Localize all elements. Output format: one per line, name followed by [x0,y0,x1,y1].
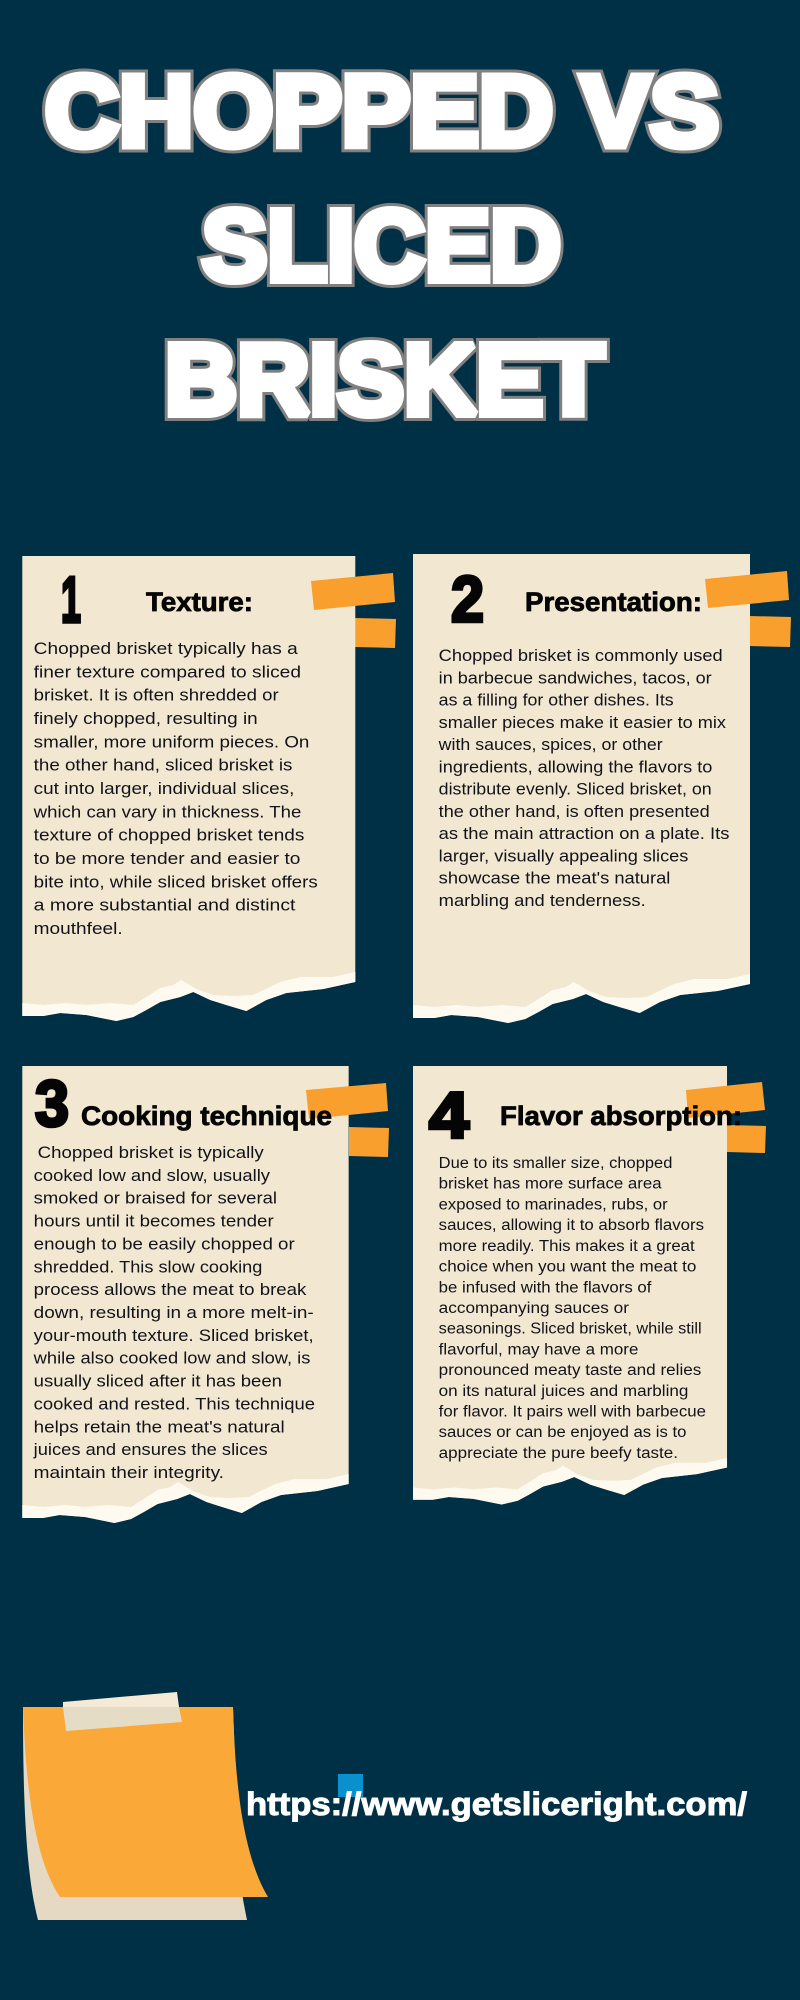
text block: presentation: showcase the meat's natural [439,870,670,888]
number 4: 4 [429,1078,469,1152]
text block: cooking technique: hours until it becomes tender [34,1212,274,1231]
text block: cooking technique: cooked and rested. This technique [34,1394,315,1414]
text block: cooking technique: down, resulting in a more melt-in- [34,1303,314,1322]
text block: cooking technique: usually sliced after it has been [34,1372,282,1391]
text block: flavor absorption: Due to its smaller size, chopped [439,1155,672,1172]
text block: texture: finer texture compared to sliced [34,662,301,681]
text block: flavor absorption: choice when you want the meat to [439,1259,696,1276]
heading: cooking technique: Cooking technique [81,1101,332,1131]
title: SLICED [202,190,561,302]
text block: presentation: in barbecue sandwiches, tacos, or [439,669,712,687]
text block: cooking technique: helps retain the meat's natural [34,1417,285,1436]
text block: flavor absorption: pronounced meaty taste and relies [439,1362,702,1379]
title: CHOPPED [45,56,553,168]
text block: cooking technique: Chopped brisket is typically [38,1143,264,1162]
text block: texture: Chopped brisket typically has a [34,639,298,658]
text block: presentation [438,647,729,910]
title: CHOPPED [45,56,553,168]
text block: presentation: Chopped brisket is commonly used [439,647,723,665]
number 2: 2 [451,562,484,636]
text block: presentation: smaller pieces make it easier to mix [439,714,727,732]
text block: cooking technique [33,1143,315,1482]
text block: presentation: distribute evenly. Sliced brisket, on [439,781,712,799]
panel: texture [22,556,396,1021]
panel: flavor absorption [413,1066,766,1505]
text block: presentation: as the main attraction on a plate. Its [439,825,729,843]
text block: cooking technique: your-mouth texture. Sliced brisket, [34,1326,314,1345]
heading: presentation: Presentation: [525,587,702,617]
text block: flavor absorption: for flavor. It pairs well with barbecue [439,1404,706,1420]
text block: texture: brisket. It is often shredded or [34,686,279,705]
text block: flavor absorption: sauces, allowing it to absorb flavors [439,1217,704,1234]
text block: presentation: ingredients, allowing the flavors to [439,758,712,776]
text block: presentation: as a filling for other dishes. Its [439,692,674,710]
text block: texture [33,639,318,938]
text block: texture: the other hand, sliced brisket is [34,756,292,775]
text block: texture: smaller, more uniform pieces. On [34,732,309,751]
icon: blue square [338,1774,363,1797]
url link text: https://www.getsliceright.com/ [246,1786,747,1822]
text block: flavor absorption: exposed to marinades, rubs, or [439,1196,668,1213]
number 1: 1 [61,563,81,636]
number 3: 3 [35,1067,69,1140]
text block: flavor absorption: seasonings. Sliced brisket, while still [439,1321,702,1338]
text block: flavor absorption: flavorful, may have a more [439,1341,638,1358]
title: SLICED [202,190,561,302]
text block: flavor absorption: accompanying sauces or [439,1300,629,1317]
text block: texture: a more substantial and distinct [34,896,296,915]
panel: cooking technique [22,1066,389,1523]
text block: cooking technique: cooked low and slow, usually [34,1166,271,1185]
text block: cooking technique: shredded. This slow cooking [34,1257,262,1276]
text block: texture: texture of chopped brisket tends [34,826,304,845]
title: VS [581,56,719,168]
text block: cooking technique: smoked or braised for several [34,1189,277,1208]
text block: presentation: with sauces, spices, or other [438,736,663,754]
text block: texture: mouthfeel. [34,919,123,938]
heading: flavor absorption: Flavor absorption: [500,1101,742,1131]
panel: presentation [413,554,791,1023]
text block: flavor absorption: brisket has more surface area [439,1176,662,1193]
text block: flavor absorption: be infused with the flavors of [439,1279,652,1296]
text block: texture: to be more tender and easier to [34,849,300,868]
text block: texture: bite into, while sliced brisket offers [34,872,318,891]
text block: presentation: the other hand, is often presented [439,803,710,821]
text block: flavor absorption: on its natural juices and marbling [439,1383,688,1400]
text block: presentation: marbling and tenderness. [439,892,646,910]
text block: cooking technique: while also cooked low and slow, is [33,1349,310,1368]
text block: cooking technique: process allows the meat to break [34,1280,307,1299]
text block: cooking technique: maintain their integrity. [34,1463,224,1482]
title [45,56,719,436]
text block: flavor absorption: sauces or can be enjoyed as is to [439,1424,686,1441]
text block: cooking technique: enough to be easily chopped or [34,1234,295,1253]
text block: texture: finely chopped, resulting in [34,709,258,728]
icon: sticky note [23,1692,268,1920]
text block: cooking technique: juices and ensures the slices [33,1440,268,1459]
text block: flavor absorption: appreciate the pure beefy taste. [439,1445,678,1462]
text block: texture: which can vary in thickness. The [33,802,301,821]
text block: presentation: larger, visually appealing slices [439,847,688,865]
text block: flavor absorption [439,1155,706,1462]
title: BRISKET [165,324,604,436]
text block: texture: cut into larger, individual slices, [34,779,294,798]
title: BRISKET [165,324,604,436]
heading: texture: Texture: [146,587,253,617]
title: VS [581,56,719,168]
text block: flavor absorption: more readily. This makes it a great [439,1238,695,1255]
